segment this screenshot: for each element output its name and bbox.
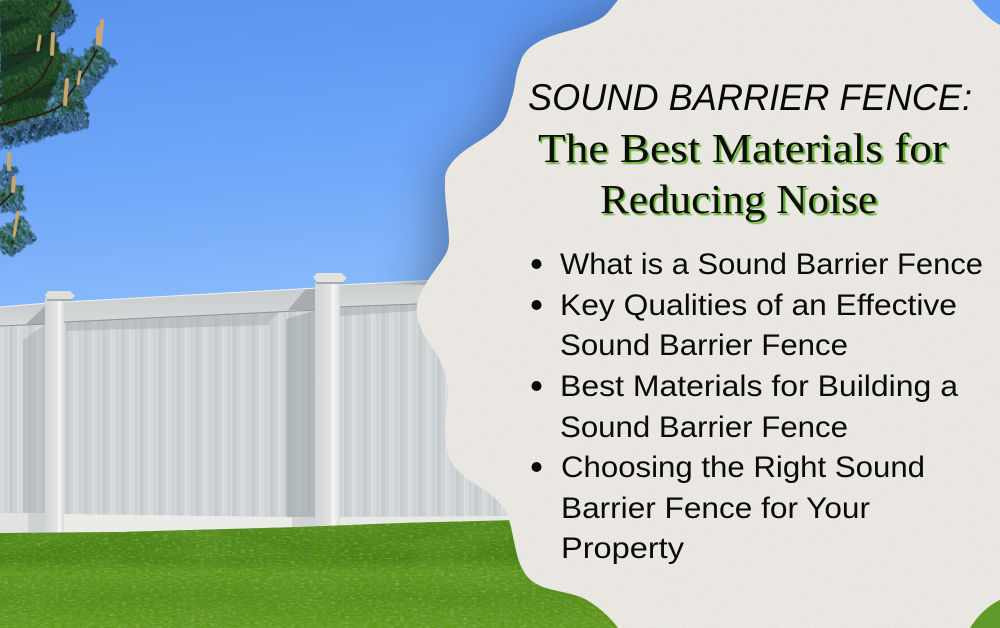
bottom rails [0, 513, 520, 534]
title line 3: Reducing Noise [600, 176, 877, 222]
pine limbs [0, 2, 97, 205]
title block [528, 77, 972, 224]
grass lawn [0, 518, 640, 628]
title line 1: SOUND BARRIER FENCE: [528, 77, 972, 118]
pine buds [9, 21, 102, 236]
bullet item 3: Best Materials for Building a [560, 370, 958, 403]
bullet item 4: Property [561, 532, 684, 565]
bullet item 4: Barrier Fence for Your [561, 492, 870, 525]
fence backing [0, 320, 520, 535]
bullet item 1: What is a Sound Barrier Fence [560, 248, 983, 281]
fence panel: left [0, 324, 45, 515]
bullet list [532, 248, 983, 565]
bullet item 4: Choosing the Right Sound [561, 451, 925, 484]
bullet item 2: Key Qualities of an Effective [560, 289, 957, 322]
fence post: left [45, 291, 75, 534]
bullet item 3 [532, 370, 958, 444]
blob drop shadow [390, 0, 618, 285]
bullet item 2 [532, 289, 957, 362]
bullet item 2: Sound Barrier Fence [560, 329, 848, 362]
fence panel: right [338, 298, 520, 518]
fence panel: centre [64, 310, 317, 518]
grass in bottom right corner [960, 590, 1000, 628]
title line 3 shadow: Reducing Noise [602, 178, 880, 224]
top rails [0, 280, 440, 326]
title line 2: The Best Materials for [538, 125, 947, 171]
bullet item 4 [532, 451, 925, 565]
white vinyl fence [0, 273, 520, 535]
bullet item 3: Sound Barrier Fence [560, 411, 848, 444]
title line 2 shadow: The Best Materials for [540, 127, 950, 173]
sky [0, 0, 1000, 330]
pine tree branches [0, 0, 106, 248]
paper panel: wavy blob [400, 0, 1000, 628]
pine foliage [0, 0, 106, 248]
fence post: right [313, 273, 347, 528]
